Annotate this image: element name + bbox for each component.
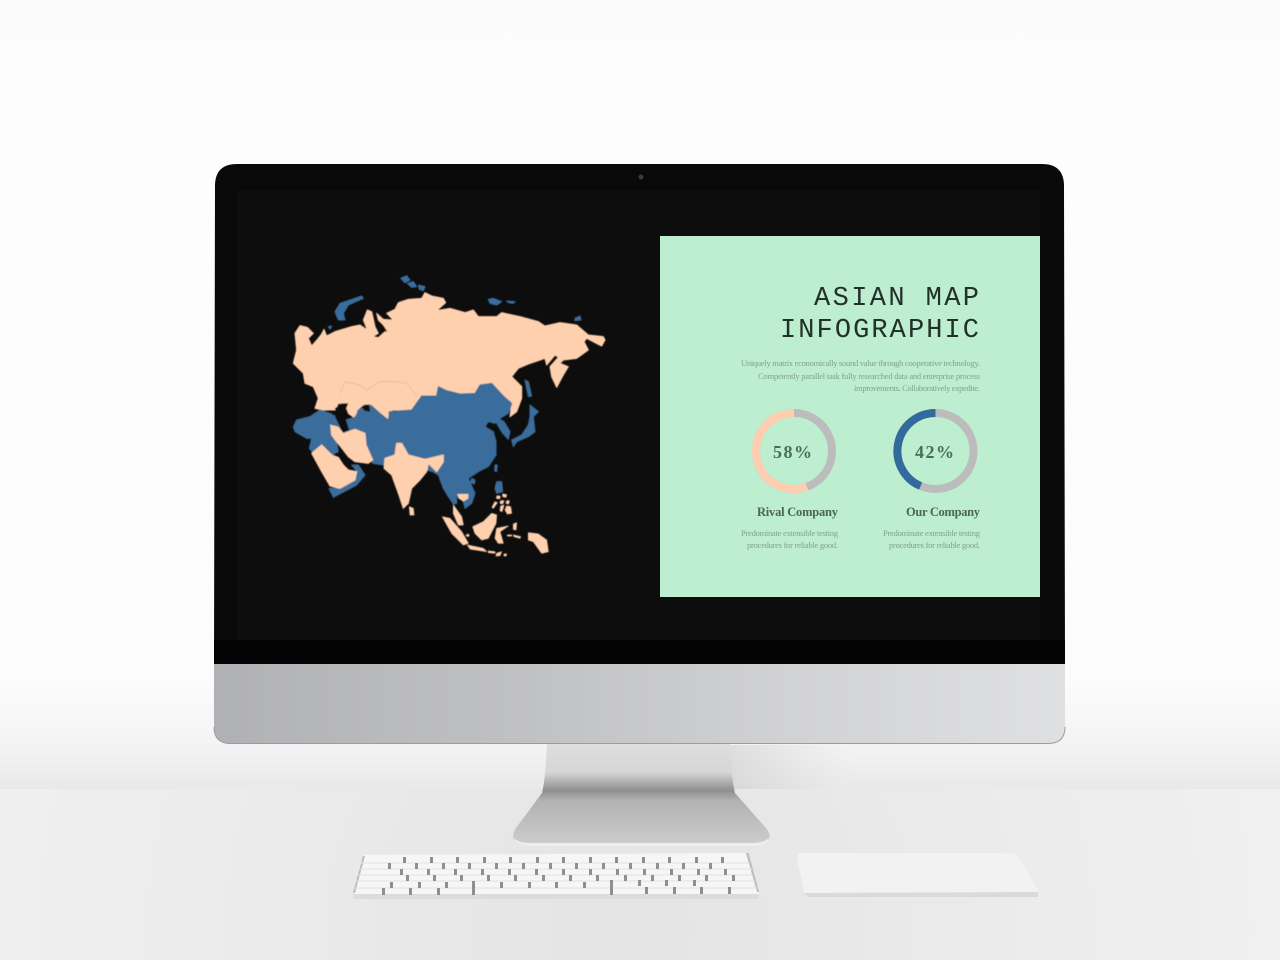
arctic islands [328,276,581,397]
donut chart: rival company 58%: 58% [773,442,812,462]
intro text: Competently parallel task fully researched data and enterprise process [758,371,980,381]
arabia south [329,465,365,497]
title: ASIAN MAP [814,284,979,314]
intro text: improvements. Collaboratively expedite. [854,383,980,393]
rival company label: Rival Company [757,505,839,519]
donut chart: our company 42% [897,413,974,489]
donut chart: our company 42%: 42% [915,442,954,462]
rival company description: Predominate extensible testing [741,528,839,538]
trackpad [797,853,1038,897]
asia map [293,276,605,556]
southern landmass [293,383,548,556]
background: desk [0,789,1280,960]
donut chart: rival company 58% [756,413,832,489]
rival company description: procedures for reliable good. [747,540,838,550]
saudi arabia [312,445,357,488]
stand shadow on wall [730,745,850,789]
screen [237,190,1040,640]
title: INFOGRAPHIC [780,316,979,346]
panel: infographic card [660,236,1040,597]
central and east asia [345,383,512,508]
panel background [660,236,1040,597]
caspian and aral seas [335,403,370,432]
intro text: Uniquely matrix economically sound value through cooperative technology. [741,358,980,368]
monitor chin [214,660,1065,744]
iran [331,425,373,463]
middle east [293,410,342,455]
india [384,443,443,508]
korea and japan [471,405,538,493]
monitor bezel [214,164,1065,664]
cambodia [457,494,468,502]
our company label: Our Company [906,505,981,519]
islands of southeast asia [409,494,548,556]
our company description: Predominate extensible testing [883,528,981,538]
monitor stand [513,744,770,846]
title [780,284,979,346]
our company description: procedures for reliable good. [889,540,980,550]
keyboard [353,853,759,899]
rival company description [741,528,839,550]
camera [638,174,644,180]
our company description [883,528,981,550]
monitor body [214,164,1065,744]
northern landmass: Russia and Kazakhstan [293,276,605,419]
intro text [741,358,980,393]
